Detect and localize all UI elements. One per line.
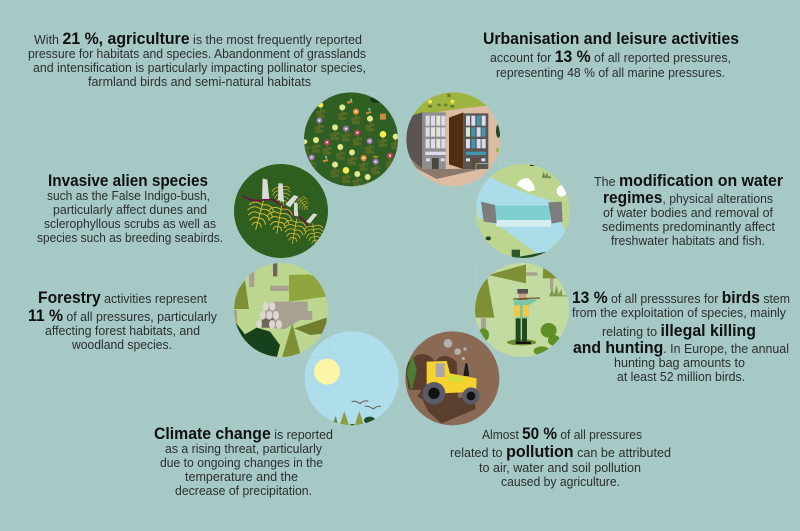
text: pollution: to air, water and soil pollution (479, 460, 641, 475)
text: birds and hunting: and hunting. In Europe, the annual (573, 339, 789, 357)
text: birds and hunting: at least 52 million birds. (617, 369, 745, 384)
text: invasive alien species: such as the False Indigo-bush, (47, 188, 210, 203)
text: invasive alien species: Invasive alien species (48, 172, 208, 190)
icon: agriculture meadow (300, 92, 400, 190)
icon: dam on river (475, 163, 572, 260)
text: pollution: caused by agriculture. (501, 474, 620, 489)
text: water regimes: of water bodies and removal of (603, 205, 773, 220)
icon: forestry logs (232, 262, 331, 360)
text: urbanisation: Urbanisation and leisure activities (483, 30, 739, 48)
text: forestry: affecting forest habitats, and (45, 323, 200, 338)
text: climate change: decrease of precipitation. (175, 483, 312, 498)
text: water regimes: sediments predominantly affect (602, 219, 775, 234)
text: forestry (28, 289, 217, 352)
text: urbanisation: account for 13 % of all reported pressures, (490, 48, 731, 66)
text: birds and hunting: relating to illegal killing (602, 322, 756, 340)
text: invasive alien species: sclerophyllous scrubs as well as (44, 216, 216, 231)
text: forestry: woodland species. (71, 337, 172, 352)
text: urbanisation: representing 48 % of all marine pressures. (496, 65, 725, 80)
text: pollution: Almost 50 % of all pressures (482, 425, 642, 443)
text: birds and hunting: from the exploitation of species, mainly (572, 305, 786, 320)
text: pollution: related to pollution can be attributed (450, 443, 671, 461)
text: water regimes: The modification on water (594, 172, 784, 190)
text: climate change: due to ongoing changes in the (160, 455, 323, 470)
text: agriculture (28, 30, 366, 89)
icon: climate sun and birds (303, 330, 400, 427)
text: water regimes: freshwater habitats and fish. (611, 233, 765, 248)
text: climate change: temperature and the (185, 469, 298, 484)
text: agriculture: farmland birds and semi-natural habitats (88, 74, 311, 89)
text: climate change: as a rising threat, particularly (165, 441, 322, 456)
text: climate change: Climate change is reported (154, 425, 333, 443)
icon: invasive alien species (234, 164, 328, 258)
text: invasive alien species: species such as breeding seabirds. (37, 230, 223, 245)
text: birds and hunting (572, 289, 790, 384)
text: water regimes: regimes, physical alterations (603, 189, 773, 207)
icon: urbanisation buildings (405, 90, 502, 188)
text: invasive alien species (37, 172, 223, 245)
text: agriculture: With 21 %, agriculture is the most frequently reported (34, 30, 362, 48)
icon: tractor pollution (403, 330, 502, 428)
text: birds and hunting: 13 % of all presssures for birds stem (572, 289, 790, 307)
text: climate change (154, 425, 333, 498)
text: pollution (450, 425, 671, 489)
text: invasive alien species: particularly affect dunes and (53, 202, 207, 217)
text: agriculture: and intensification is particularly impacting pollinator species, (33, 60, 366, 75)
text: agriculture: pressure for habitats and species. Abandonment of grasslands (28, 46, 366, 61)
text: water regimes (594, 172, 784, 248)
text: birds and hunting: hunting bag amounts to (614, 355, 745, 370)
text: urbanisation (483, 30, 739, 80)
icon: hunter (474, 262, 571, 358)
text: forestry: 11 % of all pressures, particularly (28, 307, 217, 325)
text: forestry: Forestry activities represent (38, 289, 207, 307)
